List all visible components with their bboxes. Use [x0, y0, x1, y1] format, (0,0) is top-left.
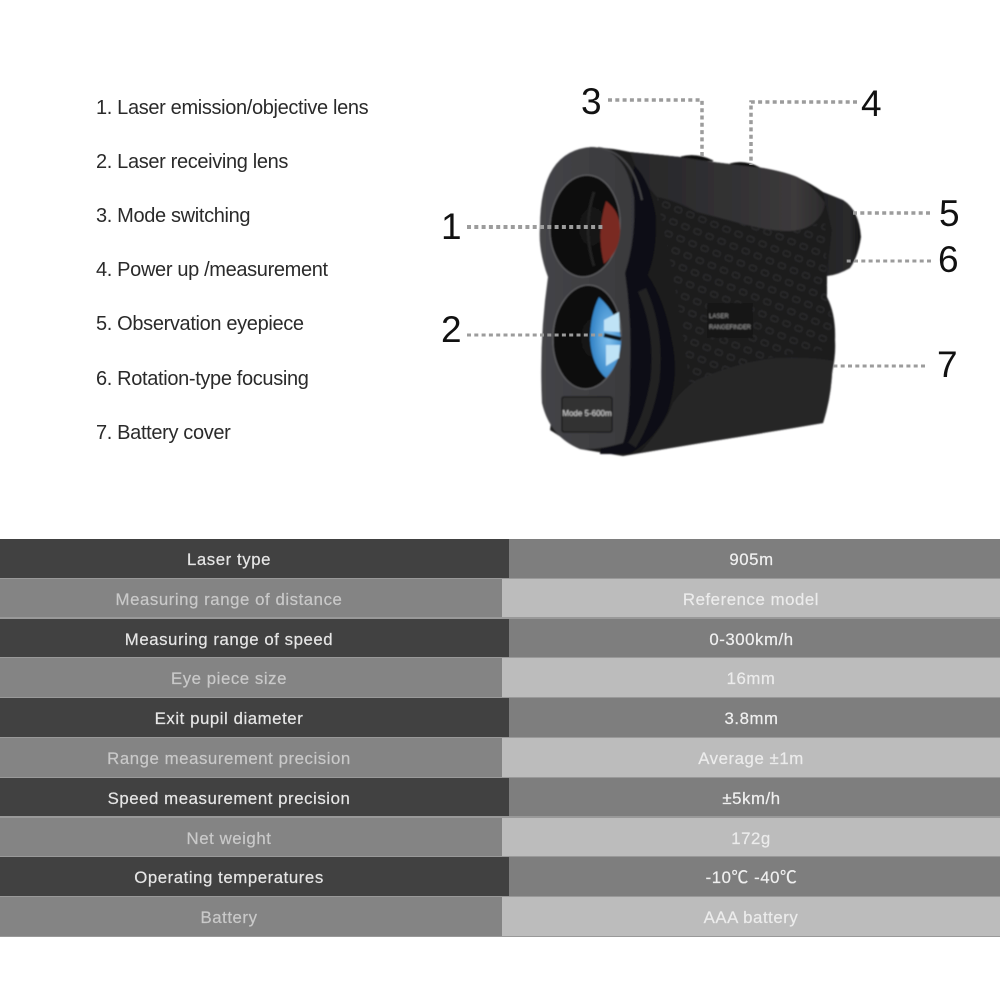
lower lens [550, 283, 624, 391]
row: speed measurement precision: Speed measurement precision [108, 789, 350, 808]
legend item 2: 2. Laser receiving lens [96, 151, 288, 173]
eyepiece [823, 192, 861, 276]
row: laser type: 905m [729, 550, 774, 569]
callout 5 [850, 193, 960, 234]
list: parts legend [96, 97, 368, 444]
row: eye piece size [0, 658, 1000, 697]
callout 7: 7 [937, 344, 958, 385]
callout 2: 2 [441, 309, 462, 350]
upper lens [547, 173, 623, 279]
front plate [540, 147, 634, 449]
row: net weight: Net weight [187, 829, 271, 848]
row: eye piece size: Eye piece size [171, 669, 287, 688]
label patch: RANGEFINDER [709, 325, 752, 331]
label patch [707, 303, 753, 338]
label patch: LASER [709, 314, 729, 320]
row: measuring range of distance: Measuring range of distance [116, 590, 342, 609]
lower shell [640, 358, 833, 453]
row: speed measurement precision [0, 778, 1000, 816]
row: battery: AAA battery [704, 908, 798, 927]
callout 5: 5 [939, 193, 960, 234]
side flank [600, 165, 675, 454]
callout 3 [581, 81, 702, 158]
upper shell [630, 152, 825, 231]
callout 6: 6 [938, 239, 959, 280]
row: exit pupil diameter [0, 698, 1000, 737]
callout 4 [751, 83, 882, 165]
callout 7 [832, 344, 958, 385]
legend item 4: 4. Power up /measurement [96, 259, 328, 281]
row: battery: Battery [200, 908, 258, 927]
row: eye piece size: 16mm [727, 669, 775, 688]
row: exit pupil diameter: 3.8mm [724, 709, 779, 728]
rangefinder device [441, 81, 960, 456]
model badge: Mode 5-600m [562, 409, 612, 418]
row: measuring range of speed: 0-300km/h [709, 630, 794, 649]
top buttons [681, 156, 760, 168]
row: exit pupil diameter: Exit pupil diameter [155, 709, 303, 728]
row: range measurement precision: Range measurement precision [107, 749, 351, 768]
legend item 7: 7. Battery cover [96, 422, 230, 444]
grip texture [657, 197, 832, 385]
model badge [562, 397, 612, 432]
row: measuring range of distance [0, 579, 1000, 617]
row: operating temperatures [0, 857, 1000, 896]
main body [550, 147, 835, 456]
specification table [0, 539, 1000, 937]
row: operating temperatures: -10℃ -40℃ [706, 868, 797, 887]
legend item 6: 6. Rotation-type focusing [96, 368, 308, 390]
row: laser type: Laser type [187, 550, 271, 569]
row: range measurement precision [0, 738, 1000, 777]
row: measuring range of speed: Measuring range of speed [125, 630, 333, 649]
legend item 3: 3. Mode switching [96, 205, 250, 227]
row: range measurement precision: Average ±1m [698, 749, 804, 768]
legend item 5: 5. Observation eyepiece [96, 313, 304, 335]
row: operating temperatures: Operating temperatures [134, 868, 324, 887]
callout 1: 1 [441, 206, 462, 247]
row: net weight: 172g [731, 829, 771, 848]
row: battery [0, 897, 1000, 936]
callout 6 [846, 239, 959, 280]
callout 3: 3 [581, 81, 602, 122]
row: speed measurement precision: ±5km/h [722, 789, 781, 808]
row: measuring range of speed [0, 619, 1000, 657]
product diagram: rangefinder with callouts [441, 81, 960, 457]
row: measuring range of distance: Reference model [683, 590, 819, 609]
legend item 1: 1. Laser emission/objective lens [96, 97, 368, 119]
callout 4: 4 [861, 83, 882, 124]
row: net weight [0, 818, 1000, 856]
row: laser type [0, 539, 1000, 578]
